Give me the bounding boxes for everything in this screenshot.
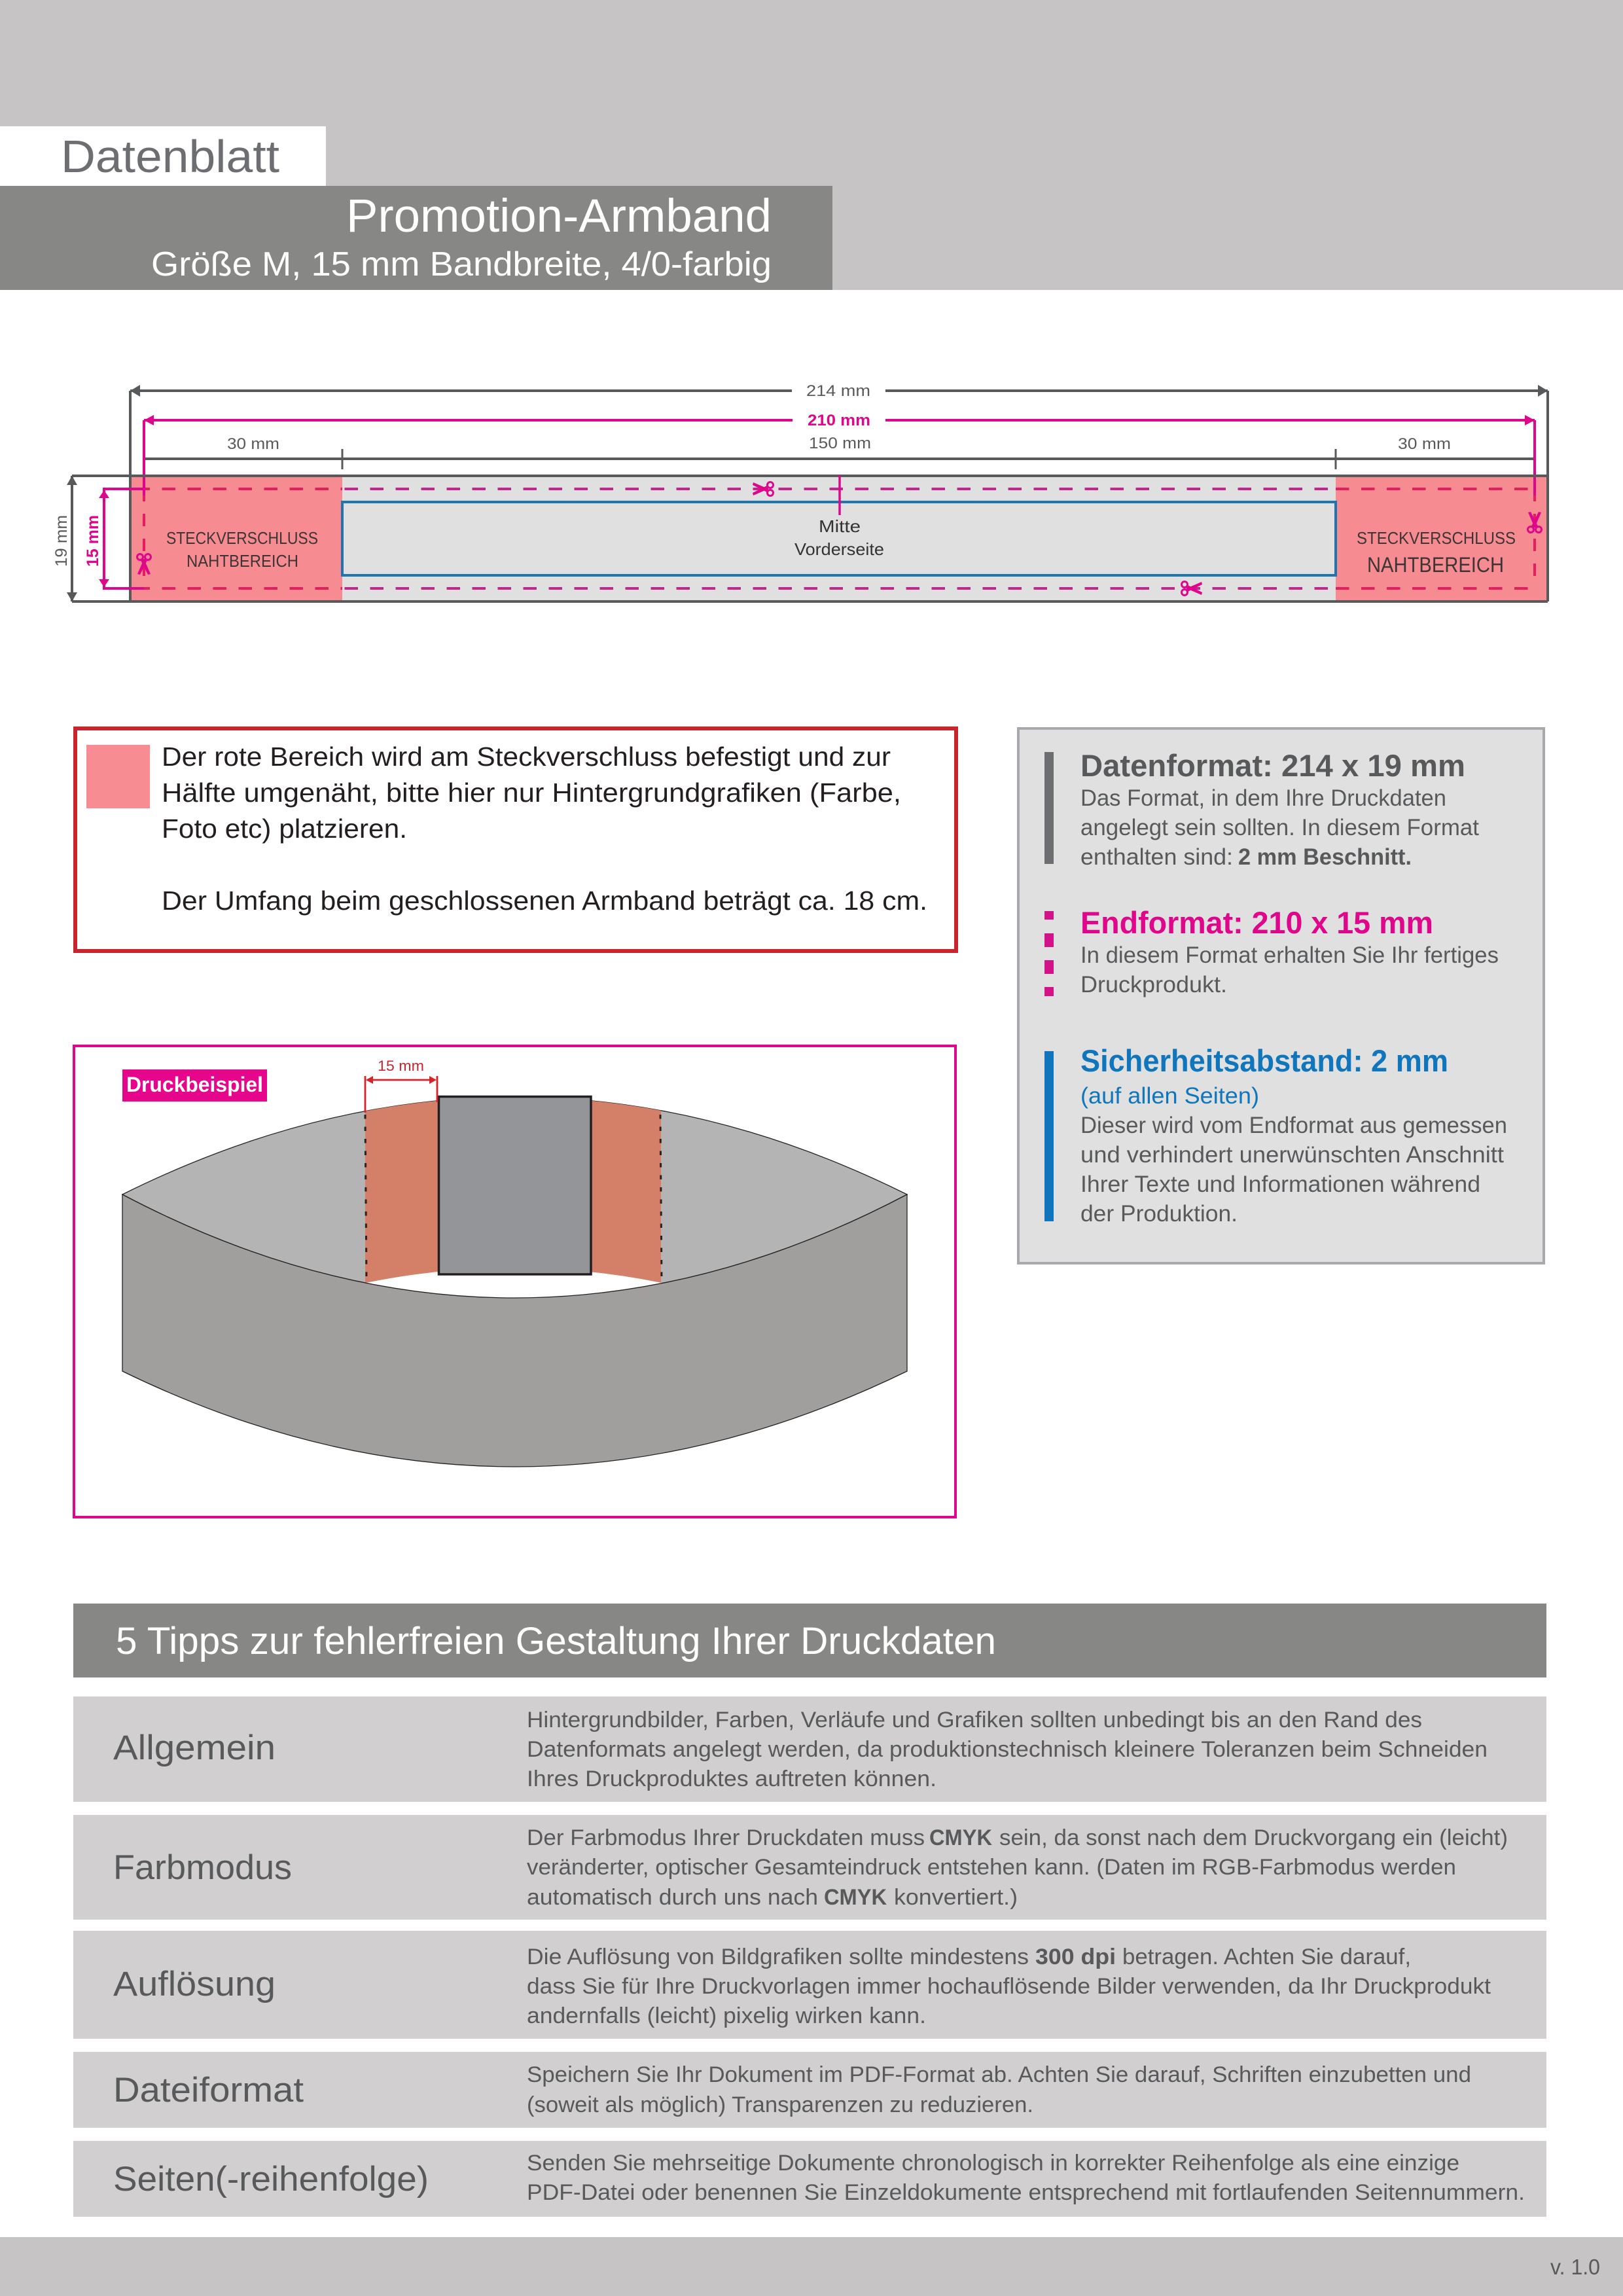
band outline lines — [72, 476, 1548, 601]
legend: Sicherheitsabstand — [1044, 1043, 1507, 1227]
tip: Farbmodus: automatisch durch uns nach — [527, 1885, 818, 1910]
tip: Farbmodus — [73, 1815, 1546, 1920]
dimension 15 mm — [84, 489, 144, 588]
note text — [162, 742, 927, 916]
legend: Sicherheitsabstand: Sicherheitsabstand: 2 mm — [1080, 1043, 1448, 1078]
tag: Druckbeispiel — [122, 1069, 267, 1102]
note text: Der rote Bereich wird am Steckverschluss befestigt und zur — [162, 742, 891, 772]
tip: Auflösung: Auflösung — [113, 1965, 276, 2003]
centre mark — [794, 475, 884, 559]
tip: Seiten(-reihenfolge): Senden Sie mehrseitige Dokumente chronologisch in korrekter Reihenfolge als eine einzige — [527, 2151, 1459, 2176]
dimension 214 mm: 214 mm — [806, 382, 870, 400]
label left closure: NAHTBEREICH — [187, 551, 298, 571]
tip: Dateiformat: Dateiformat — [113, 2071, 304, 2109]
technical band diagram — [52, 382, 1548, 601]
wristband illustration — [122, 1096, 908, 1467]
title block — [0, 186, 832, 290]
tip: Farbmodus: CMYK — [929, 1825, 992, 1850]
centre mark: Vorderseite — [794, 539, 884, 559]
tip: Seiten(-reihenfolge): Seiten(-reihenfolge) — [113, 2160, 429, 2198]
tip: Farbmodus: veränderter, optischer Gesamteindruck entstehen kann. (Daten im RGB-Farbmodus werden — [527, 1855, 1456, 1880]
note text: Der Umfang beim geschlossenen Armband beträgt ca. 18 cm. — [162, 886, 927, 916]
tip: Allgemein: Ihres Druckproduktes auftreten können. — [527, 1767, 936, 1791]
tip: Allgemein: Hintergrundbilder, Farben, Verläufe und Grafiken sollten unbedingt bis an den Rand des — [527, 1708, 1422, 1732]
tip: Farbmodus: CMYK — [824, 1885, 887, 1910]
tip: Farbmodus: konvertiert.) — [894, 1885, 1018, 1910]
tip: Farbmodus: sein, da sonst nach dem Druckvorgang ein (leicht) — [999, 1825, 1508, 1850]
dimension 210 mm — [144, 412, 1535, 495]
panel: closure note — [75, 728, 956, 951]
icon: scissors left — [137, 554, 151, 575]
tip: Auflösung — [73, 1931, 1546, 2039]
label right closure: STECKVERSCHLUSS — [1357, 528, 1516, 548]
tip: Seiten(-reihenfolge) — [73, 2141, 1546, 2217]
label right closure: NAHTBEREICH — [1367, 553, 1504, 577]
tip: Auflösung: andernfalls (leicht) pixelig wirken kann. — [527, 2003, 926, 2028]
legend: Sicherheitsabstand: Ihrer Texte und Informationen während — [1080, 1172, 1480, 1197]
tip: Dateiformat — [73, 2052, 1546, 2128]
dimension 214 mm — [130, 382, 1548, 601]
legend: Datenformat — [1044, 748, 1479, 870]
legend: Sicherheitsabstand: (auf allen Seiten) — [1080, 1083, 1259, 1109]
heading: 5 Tipps — [73, 1604, 1546, 1677]
tip: Farbmodus: Farbmodus — [113, 1848, 292, 1887]
legend: Endformat: In diesem Format erhalten Sie Ihr fertiges — [1080, 942, 1499, 968]
title block: Promotion-Armband — [346, 190, 772, 242]
legend: Endformat: Druckprodukt. — [1080, 972, 1227, 997]
legend: Datenformat: Datenformat: 214 x 19 mm — [1080, 748, 1465, 783]
legend: Datenformat: angelegt sein sollten. In diesem Format — [1080, 815, 1479, 840]
header band — [0, 0, 1623, 290]
footer with version — [0, 2237, 1623, 2296]
band surface — [130, 476, 1548, 601]
footer with version: v. 1.0 — [1550, 2255, 1600, 2279]
dimension 30/150/30 mm — [144, 435, 1535, 469]
tip: Allgemein: Datenformats angelegt werden, da produktionstechnisch kleinere Toleranzen beim Schneiden — [527, 1737, 1488, 1762]
panel: print example — [74, 1046, 955, 1517]
heading: 5 Tipps: 5 Tipps zur fehlerfreien Gestaltung Ihrer Druckdaten — [116, 1620, 996, 1662]
legend: Sicherheitsabstand: und verhindert unerwünschten Anschnitt — [1080, 1142, 1504, 1168]
dimension 30/150/30 mm: 30 mm — [1398, 435, 1451, 453]
tip: Auflösung: 300 dpi — [1035, 1945, 1116, 1969]
note text: Foto etc) platzieren. — [162, 814, 407, 844]
swatch: red area — [86, 745, 150, 808]
dimension 19 mm — [52, 476, 77, 601]
icon: scissors top — [753, 482, 774, 496]
legend: Endformat — [1044, 905, 1499, 997]
legend: Sicherheitsabstand: der Produktion. — [1080, 1201, 1238, 1227]
safety margin outline — [342, 502, 1336, 575]
panel: format legend — [1018, 728, 1544, 1263]
tip: Auflösung: dass Sie für Ihre Druckvorlagen immer hochauflösende Bilder verwenden, da Ihr Druckprodukt — [527, 1974, 1491, 1999]
label: Datenblatt: Datenblatt — [61, 131, 279, 182]
legend: Datenformat: enthalten sind: — [1080, 844, 1233, 870]
legend: Datenformat: Das Format, in dem Ihre Druckdaten — [1080, 785, 1446, 811]
dimension 30/150/30 mm: 30 mm — [227, 435, 279, 453]
tip: Dateiformat: Speichern Sie Ihr Dokument im PDF-Format ab. Achten Sie darauf, Schriften einzubetten und — [527, 2062, 1471, 2087]
icon: scissors right — [1527, 512, 1542, 533]
centre mark: Mitte — [819, 516, 861, 536]
tip: Farbmodus: Der Farbmodus Ihrer Druckdaten muss — [527, 1825, 925, 1850]
label left closure: STECKVERSCHLUSS — [166, 528, 318, 548]
icon: scissors bottom — [1182, 581, 1202, 596]
tip: Allgemein — [73, 1696, 1546, 1802]
label right closure — [1357, 528, 1516, 577]
tip: Allgemein: Allgemein — [113, 1729, 276, 1767]
dimension 30/150/30 mm: 150 mm — [809, 435, 871, 452]
dimension 210 mm: 210 mm — [808, 412, 870, 429]
tip: Auflösung: Die Auflösung von Bildgrafiken sollte mindestens — [527, 1945, 1029, 1969]
dimension 19 mm: 19 mm — [52, 515, 71, 567]
label: Datenblatt — [0, 126, 326, 187]
note text: Hälfte umgenäht, bitte hier nur Hintergrundgrafiken (Farbe, — [162, 778, 901, 808]
dimension 15 mm example: 15 mm — [378, 1058, 424, 1074]
label left closure — [166, 528, 318, 571]
dimension 15 mm example — [365, 1058, 437, 1113]
tip: Auflösung: betragen. Achten Sie darauf, — [1122, 1945, 1411, 1969]
tip: Seiten(-reihenfolge): PDF-Datei oder benennen Sie Einzeldokumente entsprechend mit fortlaufenden Seitennummern. — [527, 2180, 1525, 2205]
legend: Datenformat: 2 mm Beschnitt. — [1238, 844, 1412, 870]
tip: Dateiformat: (soweit als möglich) Transparenzen zu reduzieren. — [527, 2092, 1033, 2117]
tag: Druckbeispiel: Druckbeispiel — [126, 1073, 263, 1096]
legend: Sicherheitsabstand: Dieser wird vom Endformat aus gemessen — [1080, 1113, 1507, 1138]
title block: Größe M, 15 mm Bandbreite, 4/0-farbig — [151, 245, 772, 283]
legend: Endformat: Endformat: 210 x 15 mm — [1080, 905, 1433, 940]
cut line dashed — [136, 489, 1535, 588]
dimension 15 mm: 15 mm — [84, 515, 102, 567]
